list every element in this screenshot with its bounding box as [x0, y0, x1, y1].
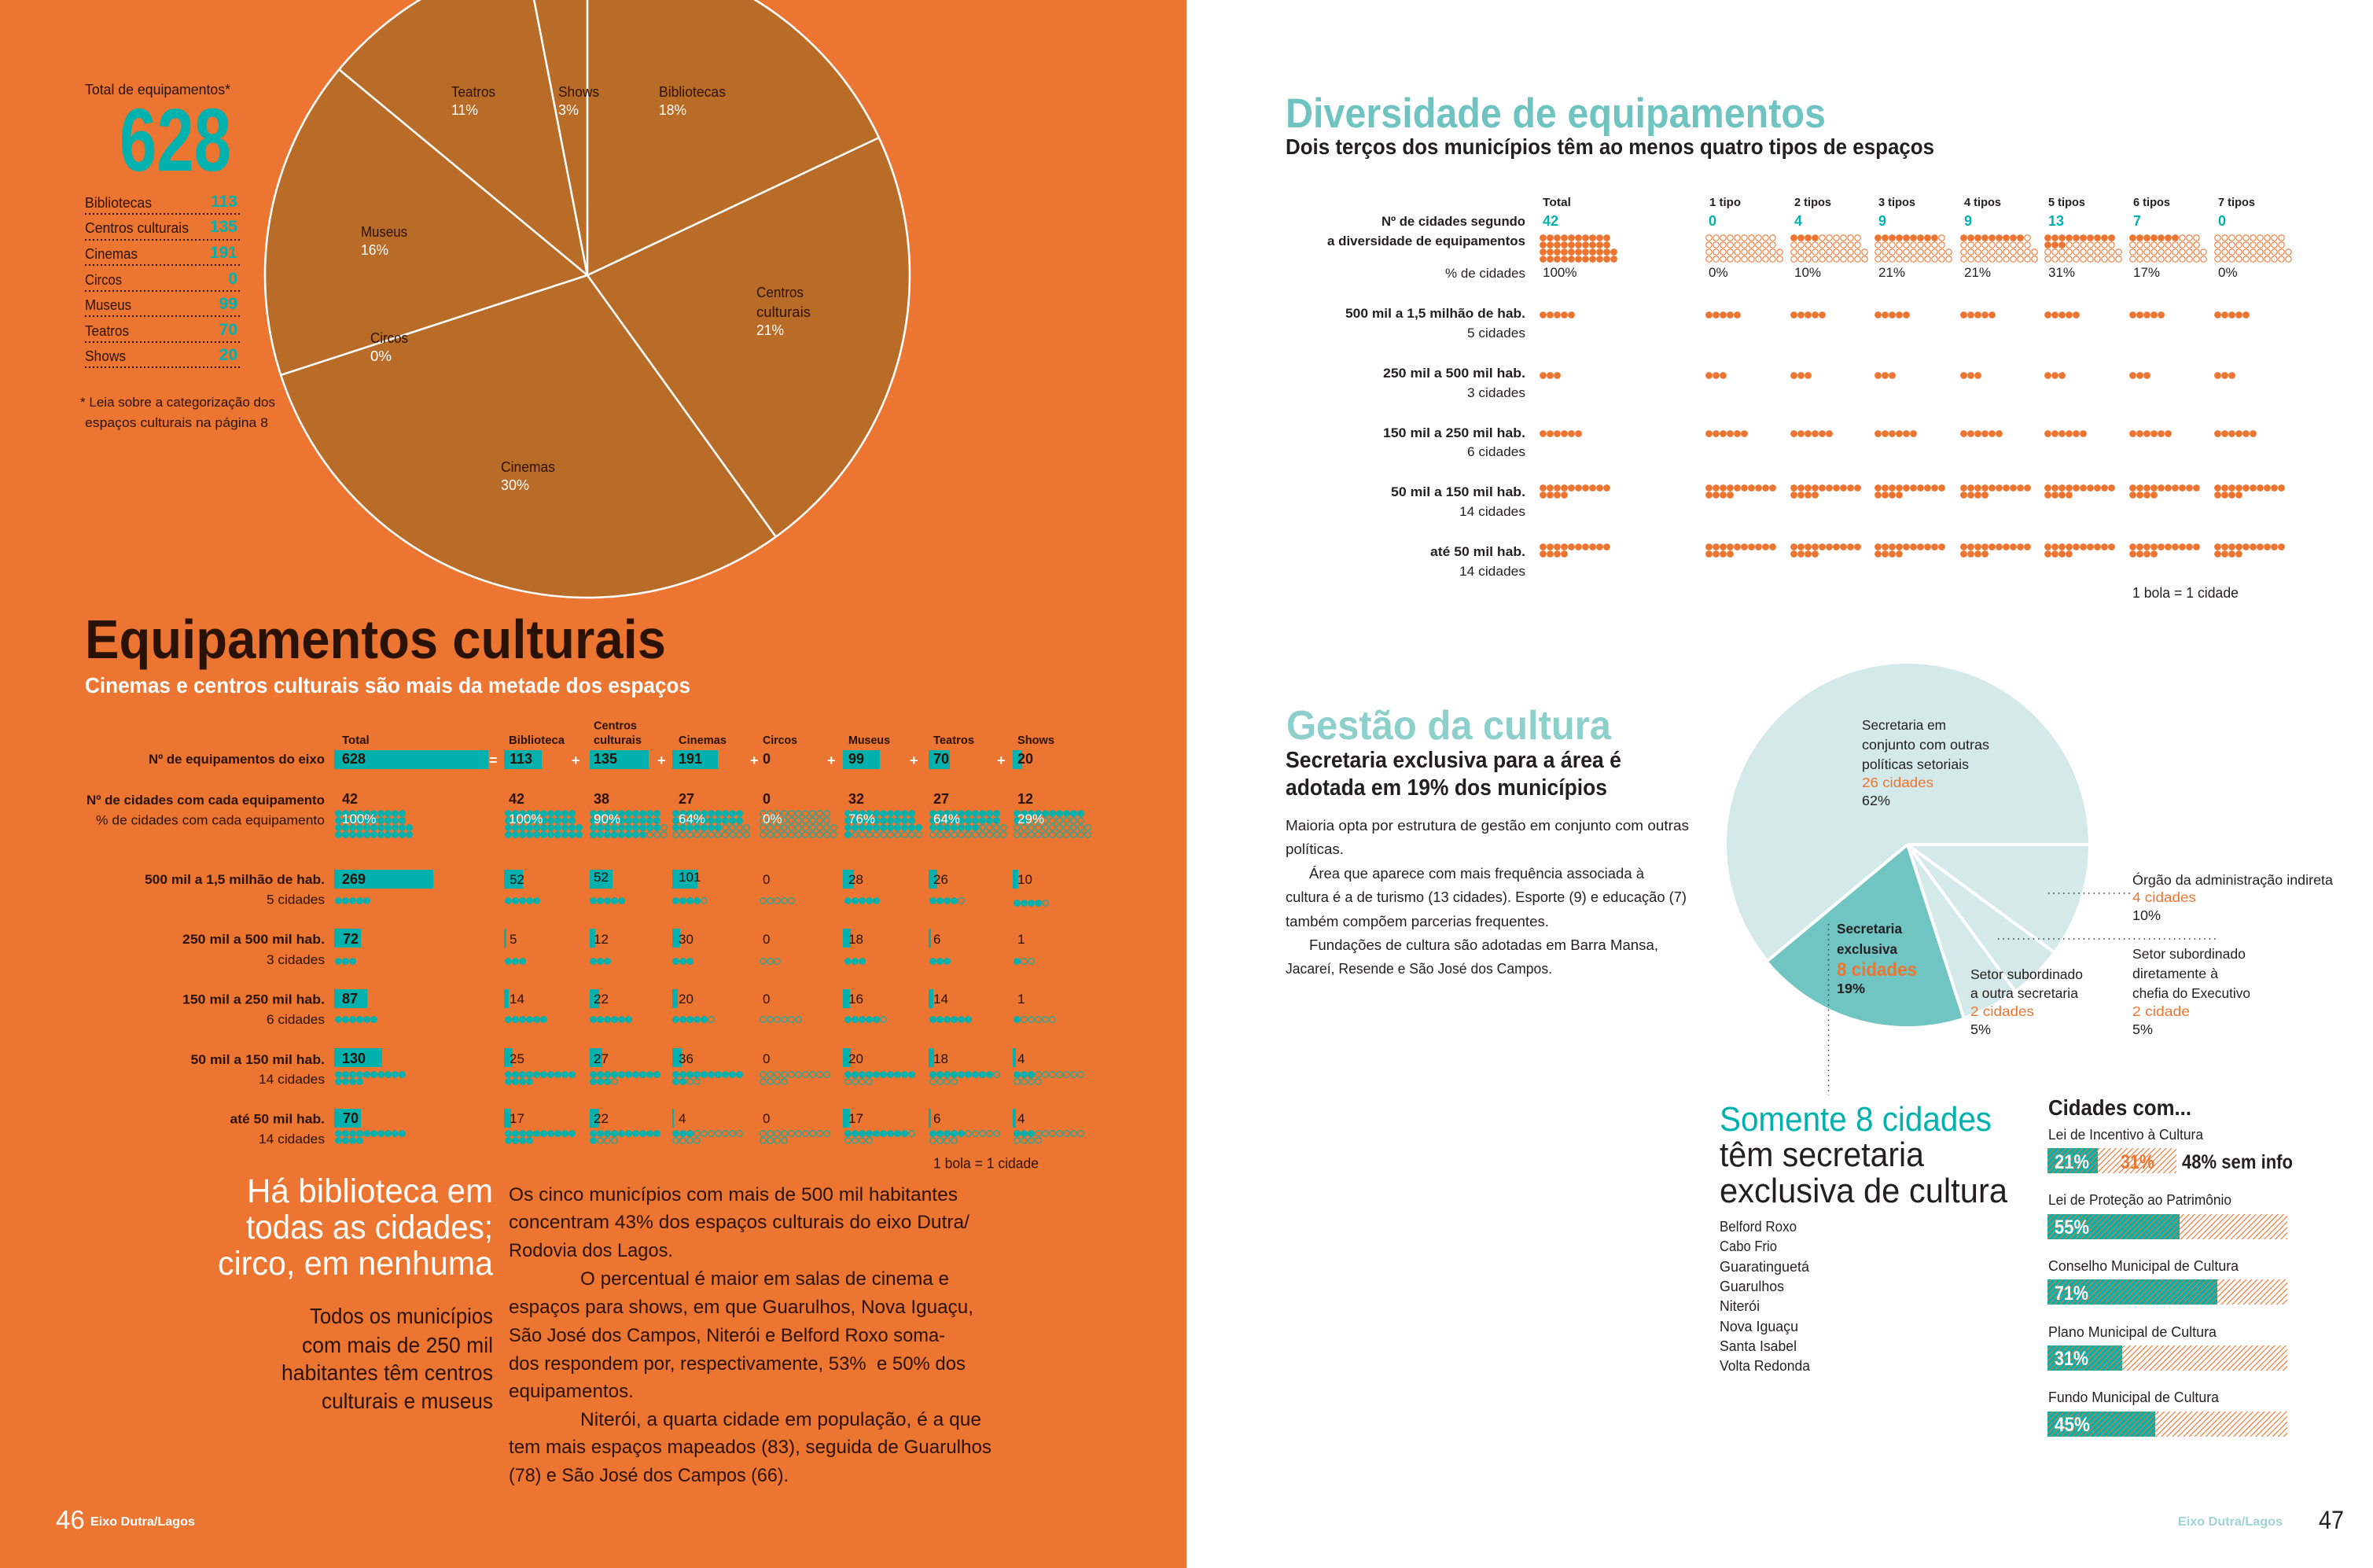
row: 500 mil a 1,5 milhão: 101 [679, 870, 701, 885]
subheading gestão: adotada em 19% dos municípios [1286, 775, 1607, 801]
row: até 50 mil: 6 [933, 1111, 940, 1126]
column headers: culturais [594, 734, 642, 747]
row: 500 mil a 1,5 milhão [145, 870, 1049, 907]
pull quote: biblioteca e circo [218, 1172, 493, 1283]
row: até 50 mil: 17 [848, 1111, 863, 1126]
body text left page: Os cinco municípios com mais de 500 mil habitantes [509, 1184, 958, 1205]
label: setor subordinado ao executivo: Setor subordinado [2132, 946, 2246, 962]
row: 150 a 250 mil: 22 [594, 992, 609, 1007]
table: diversity of equipment [1327, 196, 2292, 601]
row: 50 a 150 mil: 0 [763, 1051, 770, 1066]
bar: lei de incentivo: 21% [2055, 1151, 2089, 1173]
footnote [80, 395, 275, 430]
list of equipment counts [85, 193, 241, 367]
row: 50 a 150 mil: 36 [679, 1051, 694, 1066]
row: number and percent of cities: 21% [1878, 265, 1905, 280]
row: number and percent of cities: 0 [2218, 213, 2226, 229]
title: Equipamentos culturais: Equipamentos culturais [85, 609, 666, 670]
chart: cidades com... [2047, 1095, 2293, 1437]
row: até 50 mil: 17 [510, 1111, 524, 1126]
column headers: Total [342, 734, 370, 747]
footer right [2178, 1506, 2344, 1534]
list of cities: Belford Roxo [1720, 1219, 1797, 1235]
total label: Total de equipamentos* [85, 82, 230, 98]
list of equipment counts: 20 [219, 346, 237, 364]
list of equipment counts: Bibliotecas [85, 195, 152, 211]
chart heading: Cidades com... [2048, 1095, 2191, 1120]
row: number and percent of cities: 0% [763, 812, 782, 826]
label: setor subordinado ao executivo: diretamente à [2132, 966, 2218, 981]
body text left page: São José dos Campos, Niterói e Belford Roxo soma- [509, 1325, 945, 1346]
label: setor subordinado ao executivo: 5% [2132, 1021, 2153, 1037]
body text gestão: Área que aparece com mais frequência associada à [1309, 866, 1645, 882]
label: secretaria exclusiva: 8 cidades [1837, 959, 1917, 981]
body text left page: Niterói, a quarta cidade em população, é a que [580, 1409, 981, 1430]
pie label: Teatros: Teatros [451, 84, 495, 100]
row: number and percent of cities: 42 [1543, 213, 1558, 229]
body text left page: O percentual é maior em salas de cinema e [580, 1268, 949, 1290]
row: até 50 mil: até 50 mil hab. [1430, 545, 1525, 559]
column headers: Circos [763, 734, 797, 747]
pie label: Bibliotecas [659, 84, 726, 118]
row: number and percent of cities: 32 [848, 791, 864, 807]
bar: lei de proteção [2047, 1192, 2287, 1239]
list of equipment counts: 113 [211, 193, 237, 211]
heading: Gestão da cultura: Gestão da cultura [1286, 703, 1612, 749]
pie label: Shows: Shows [558, 84, 599, 100]
list of cities: Niterói [1720, 1298, 1760, 1314]
footer left: Eixo Dutra/Lagos [90, 1515, 195, 1529]
label: secretaria em conjunto: conjunto com outras [1862, 737, 1989, 753]
pie label: Cinemas: 30% [501, 477, 529, 493]
column headers: 3 tipos [1878, 196, 1915, 209]
body text gestão: Maioria opta por estrutura de gestão em conjunto com outras [1286, 818, 1689, 834]
label: setor subordinado a outra secretaria [1970, 966, 2083, 1037]
pie label: Bibliotecas: 18% [659, 102, 686, 118]
label: órgão da administração indireta: 10% [2132, 907, 2161, 923]
pie label: Teatros: 11% [451, 102, 478, 118]
row: 500 mil a 1,5 milhão [1345, 307, 2250, 340]
bar: lei de incentivo: 31% [2121, 1151, 2154, 1173]
row: 500 mil a 1,5 milhão: 10 [1017, 872, 1032, 887]
label: órgão da administração indireta: Órgão da administração indireta [2132, 871, 2333, 888]
footnote: espaços culturais na página 8 [85, 415, 268, 430]
row: até 50 mil: 14 cidades [259, 1132, 325, 1147]
list of cities: Guaratinguetá [1720, 1259, 1810, 1275]
label: setor subordinado ao executivo: chefia do Executivo [2132, 985, 2250, 1001]
row: 150 a 250 mil: 14 [933, 992, 948, 1007]
body text gestão: também compõem parcerias frequentes. [1286, 914, 1549, 929]
bar: lei de incentivo [2047, 1127, 2293, 1173]
row: number and percent of cities: 90% [594, 812, 620, 826]
row: 250 a 500 mil: 1 [1017, 932, 1025, 947]
row: number and percent of cities: Nº de cidades com cada equipamento [86, 793, 325, 808]
row: 500 mil a 1,5 milhão: 500 mil a 1,5 milhão de hab. [145, 873, 325, 887]
footer right: 47 [2319, 1506, 2344, 1534]
row: number and percent of cities: 31% [2048, 265, 2075, 280]
label: secretaria exclusiva: exclusiva [1837, 941, 1897, 957]
label: secretaria em conjunto: 26 cidades [1862, 775, 1933, 790]
pie label: Teatros [451, 84, 495, 118]
row: number of equipment: + [910, 753, 918, 768]
column headers: 5 tipos [2048, 196, 2085, 209]
row: number and percent of cities: 38 [594, 791, 609, 807]
list of equipment counts: Shows [85, 348, 126, 364]
row: number and percent of cities: 42 [509, 791, 524, 807]
row: number of equipment: + [827, 753, 836, 768]
big number 628: 628 [120, 90, 231, 190]
bar: conselho municipal: 71% [2055, 1283, 2088, 1305]
row: number and percent of cities: 100% [342, 812, 376, 826]
row: 500 mil a 1,5 milhão: 5 cidades [267, 893, 325, 907]
footer left: 46 [56, 1505, 85, 1534]
bar: fundo municipal: 45% [2055, 1414, 2090, 1436]
row: number of equipment: 20 [1017, 751, 1033, 767]
row: number and percent of cities: % de cidades [1445, 267, 1525, 281]
row: 50 a 150 mil [1391, 484, 2285, 519]
row: number and percent of cities: 17% [2133, 265, 2160, 280]
body text left page: tem mais espaços mapeados (83), seguida de Guarulhos [509, 1437, 992, 1458]
body text gestão: Jacareí, Resende e São José dos Campos. [1286, 961, 1552, 977]
pie label: Museus: 16% [361, 242, 388, 258]
footnote: * Leia sobre a categorização dos [80, 395, 275, 410]
label: secretaria em conjunto: 62% [1862, 793, 1890, 808]
row: number and percent of cities: 100% [1543, 265, 1576, 280]
body text gestão: Fundações de cultura são adotadas em Barra Mansa, [1309, 937, 1658, 953]
pull quote: biblioteca e circo: circo, em nenhuma [218, 1245, 493, 1283]
row: 150 a 250 mil: 6 cidades [267, 1013, 325, 1027]
list of equipment counts: 70 [219, 321, 237, 339]
subheading diversidade: Dois terços dos municípios têm ao menos quatro tipos de espaços [1286, 134, 1934, 159]
row: number and percent of cities: 7 [2133, 213, 2141, 229]
row: 150 a 250 mil: 16 [848, 992, 863, 1007]
row: number of equipment: 135 [594, 751, 617, 767]
row: 150 a 250 mil [182, 989, 1056, 1027]
column headers: Shows [1017, 734, 1054, 747]
row: number and percent of cities: 0% [1709, 265, 1728, 280]
row: até 50 mil [1430, 543, 2285, 579]
left page background [0, 0, 1186, 1568]
column headers: Cinemas [679, 734, 727, 747]
list of equipment counts: 0 [228, 270, 237, 288]
pie label: Shows [558, 84, 599, 118]
bar: lei de proteção: Lei de Proteção ao Patrimônio [2048, 1192, 2231, 1208]
subtitle: Cinemas e centros culturais são mais da metade dos espaços [85, 673, 690, 698]
label: setor subordinado a outra secretaria: 5% [1970, 1021, 1991, 1037]
row: 150 a 250 mil: 6 cidades [1467, 445, 1525, 459]
column headers [1543, 196, 2255, 209]
row: 500 mil a 1,5 milhão: 52 [594, 870, 609, 885]
row: 500 mil a 1,5 milhão: 26 [933, 872, 948, 887]
bar: lei de incentivo: 48% sem info [2182, 1151, 2293, 1173]
list of cities: Guarulhos [1720, 1279, 1784, 1294]
bar: plano municipal: 31% [2055, 1348, 2088, 1370]
row: até 50 mil: 70 [343, 1110, 359, 1126]
row: até 50 mil: 0 [763, 1111, 770, 1126]
column headers: Total [1543, 196, 1571, 209]
pie label: Centros culturais: 21% [756, 322, 784, 338]
row: até 50 mil: 22 [594, 1111, 609, 1126]
row: 150 a 250 mil: 20 [679, 992, 694, 1007]
row: 500 mil a 1,5 milhão: 52 [510, 872, 524, 887]
row: 50 a 150 mil: 50 mil a 150 mil hab. [190, 1053, 325, 1067]
row: até 50 mil: até 50 mil hab. [230, 1112, 325, 1126]
pie label: Museus: Museus [361, 224, 407, 240]
body text left page: concentram 43% dos espaços culturais do eixo Dutra/ [509, 1212, 969, 1233]
pull quote: biblioteca e circo: Há biblioteca em [247, 1172, 493, 1210]
row: number and percent of cities: 0 [763, 791, 771, 807]
row: number and percent of cities: 21% [1964, 265, 1991, 280]
row: 500 mil a 1,5 milhão: 500 mil a 1,5 milhão de hab. [1345, 307, 1525, 321]
row: 150 a 250 mil: 150 mil a 250 mil hab. [1383, 426, 1525, 440]
list of equipment counts: 99 [219, 295, 237, 313]
column headers: 4 tipos [1964, 196, 2001, 209]
row: 250 a 500 mil: 12 [594, 932, 609, 947]
row: number and percent of cities: 27 [679, 791, 694, 807]
row: até 50 mil [230, 1109, 1084, 1147]
row: number and percent of cities: 42 [342, 791, 358, 807]
label: secretaria exclusiva: 19% [1837, 981, 1865, 996]
row: até 50 mil: 4 [1017, 1111, 1025, 1126]
row: number of equipment [149, 750, 1033, 769]
bar: conselho municipal: Conselho Municipal de Cultura [2048, 1258, 2239, 1274]
list of cities: Cabo Frio [1720, 1239, 1777, 1254]
label: secretaria em conjunto: Secretaria em [1862, 717, 1946, 733]
body text left page: espaços para shows, em que Guarulhos, Nova Iguaçu, [509, 1297, 973, 1318]
row: 500 mil a 1,5 milhão: 269 [342, 871, 366, 887]
row: 50 a 150 mil: 14 cidades [259, 1073, 325, 1087]
bar: plano municipal: Plano Municipal de Cultura [2048, 1324, 2217, 1340]
row: 50 a 150 mil: 27 [594, 1051, 609, 1066]
side note: municípios com mais de 250 mil: habitantes têm centros [281, 1360, 493, 1385]
legend: 1 bola = 1 cidade: 1 bola = 1 cidade [2132, 585, 2239, 601]
row: number and percent of cities: 12 [1017, 791, 1033, 807]
panel: total of equipment [80, 82, 275, 430]
pie label: Bibliotecas: Bibliotecas [659, 84, 726, 100]
column headers: 6 tipos [2133, 196, 2170, 209]
row: number of equipment: 628 [342, 751, 366, 767]
row: number of equipment: + [657, 753, 666, 768]
list of cities: Nova Iguaçu [1720, 1319, 1798, 1334]
row: 50 a 150 mil: 25 [510, 1051, 524, 1066]
row: 500 mil a 1,5 milhão: 28 [848, 872, 863, 887]
row: number and percent of cities: 29% [1017, 812, 1044, 826]
body text left page: Rodovia dos Lagos. [509, 1240, 673, 1261]
row: number of equipment: = [489, 753, 498, 768]
right page [1286, 90, 2344, 1534]
row: 250 a 500 mil: 72 [343, 931, 359, 947]
label: setor subordinado ao executivo: 2 cidade [2132, 1003, 2190, 1019]
bar: conselho municipal [2047, 1258, 2287, 1305]
bar: lei de proteção: 55% [2055, 1216, 2089, 1239]
row: 250 a 500 mil [182, 929, 1035, 967]
list of equipment counts: Teatros [85, 323, 129, 339]
row: 50 a 150 mil: 130 [342, 1051, 366, 1066]
row: number and percent of cities: 64% [679, 812, 705, 826]
body text gestão: cultura é a de turismo (13 cidades). Esporte (9) e educação (7) [1286, 889, 1687, 905]
row: number and percent of cities: 10% [1794, 265, 1821, 280]
callout heading [1720, 1100, 2007, 1210]
row: 150 a 250 mil: 87 [342, 991, 358, 1007]
pie label: Centros culturais: culturais [756, 304, 811, 320]
bar: fundo municipal: Fundo Municipal de Cultura [2048, 1389, 2220, 1405]
pie label: Museus [361, 224, 407, 258]
list of equipment counts: 135 [210, 218, 237, 236]
row: number of equipment: 99 [848, 751, 864, 767]
label: secretaria exclusiva: Secretaria [1837, 921, 1902, 937]
bar: lei de incentivo: Lei de Incentivo à Cultura [2048, 1127, 2204, 1143]
subheading gestão [1286, 748, 1621, 801]
row: 150 a 250 mil: 1 [1017, 992, 1025, 1007]
side note: municípios com mais de 250 mil: culturais e museus [322, 1389, 493, 1413]
footer left [56, 1505, 195, 1534]
footer right: Eixo Dutra/Lagos [2178, 1515, 2283, 1529]
callout heading: têm secretaria [1720, 1136, 1924, 1174]
column headers: Museus [848, 734, 890, 747]
list of equipment counts: Circos [85, 272, 122, 288]
row: number and percent of cities: 64% [933, 812, 960, 826]
row: number of equipment: 0 [763, 751, 771, 767]
row: 250 a 500 mil [1383, 366, 2235, 400]
bar: fundo municipal [2047, 1389, 2287, 1437]
column headers: Centros [594, 719, 637, 733]
label: setor subordinado a outra secretaria: 2 cidades [1970, 1003, 2034, 1019]
label: órgão da administração indireta [2132, 871, 2333, 923]
row: number and percent of cities: 9 [1964, 213, 1972, 229]
pie chart: management structure [1727, 664, 2333, 1095]
body text left page: equipamentos. [509, 1381, 634, 1402]
pie label: Circos [370, 330, 408, 364]
row: number and percent of cities: a diversidade de equipamentos [1327, 234, 1525, 248]
row: 150 a 250 mil: 0 [763, 992, 770, 1007]
list of equipment counts: Centros culturais [85, 220, 189, 236]
row: number of equipment: + [572, 753, 580, 768]
column headers: Biblioteca [509, 734, 565, 747]
row: number of equipment: + [997, 753, 1006, 768]
heading: Diversidade de equipamentos: Diversidade de equipamentos [1286, 90, 1826, 137]
body text gestão [1286, 818, 1689, 977]
row: 150 a 250 mil: 150 mil a 250 mil hab. [182, 992, 325, 1007]
column headers: 2 tipos [1794, 196, 1831, 209]
row: number and percent of cities: 27 [933, 791, 949, 807]
row: 250 a 500 mil: 0 [763, 932, 770, 947]
row: 500 mil a 1,5 milhão: 0 [763, 872, 770, 887]
list of cities: Volta Redonda [1720, 1358, 1811, 1374]
pie chart: equipment share [265, 0, 910, 598]
label: órgão da administração indireta: 4 cidades [2132, 889, 2196, 905]
label: setor subordinado ao executivo [2132, 946, 2250, 1037]
row: 250 a 500 mil: 30 [679, 932, 694, 947]
body text left page: dos respondem por, respectivamente, 53% e 50% dos [509, 1353, 966, 1375]
row: number and percent of cities: 0% [2218, 265, 2238, 280]
pie label: Shows: 3% [558, 102, 579, 118]
side note: municípios com mais de 250 mil: Todos os municípios [310, 1304, 493, 1328]
row: 250 a 500 mil: 250 mil a 500 mil hab. [1383, 366, 1525, 381]
row: 250 a 500 mil: 18 [848, 932, 863, 947]
row: 250 a 500 mil: 250 mil a 500 mil hab. [182, 933, 325, 947]
label: setor subordinado a outra secretaria: a outra secretaria [1970, 985, 2078, 1001]
side note: municípios com mais de 250 mil: com mais de 250 mil [302, 1333, 493, 1357]
row: 150 a 250 mil: 14 [510, 992, 524, 1007]
row: 50 a 150 mil: 50 mil a 150 mil hab. [1391, 485, 1525, 499]
row: number and percent of cities [86, 791, 1091, 838]
bar: plano municipal [2047, 1324, 2287, 1371]
callout heading: exclusiva de cultura [1720, 1172, 2007, 1210]
callout: somente 8 cidades [1720, 1100, 2007, 1374]
pull quote: biblioteca e circo: todas as cidades; [246, 1209, 493, 1246]
column headers: 1 tipo [1709, 196, 1741, 209]
pie label: Cinemas [501, 459, 555, 493]
list of cities: Santa Isabel [1720, 1338, 1797, 1354]
subheading gestão: Secretaria exclusiva para a área é [1286, 748, 1621, 773]
row: 50 a 150 mil: 18 [933, 1051, 948, 1066]
row: 250 a 500 mil: 3 cidades [1467, 386, 1525, 400]
pie label: Centros culturais [756, 285, 811, 338]
pie label: Circos: Circos [370, 330, 408, 346]
row: até 50 mil: 4 [679, 1111, 686, 1126]
row: 50 a 150 mil [190, 1048, 1084, 1087]
list of equipment counts: Cinemas [85, 246, 138, 262]
row: number of equipment: 191 [679, 751, 702, 767]
label: secretaria em conjunto [1862, 717, 1989, 808]
table: equipment by city size [86, 719, 1091, 1172]
row: 150 a 250 mil [1383, 426, 2257, 459]
label: setor subordinado a outra secretaria: Setor subordinado [1970, 966, 2083, 982]
column headers: 7 tipos [2218, 196, 2255, 209]
row: number and percent of cities: Nº de cidades segundo [1381, 215, 1525, 229]
row: number of equipment: Nº de equipamentos do eixo [149, 753, 325, 767]
row: 500 mil a 1,5 milhão: 5 cidades [1467, 326, 1525, 340]
row: number of equipment: 70 [933, 751, 949, 767]
row: number of equipment: + [750, 753, 759, 768]
row: number and percent of cities: 100% [509, 812, 543, 826]
body text gestão: políticas. [1286, 841, 1344, 857]
row: number and percent of cities: 76% [848, 812, 875, 826]
label: secretaria exclusiva [1837, 921, 1917, 996]
row: number and percent of cities: 0 [1709, 213, 1716, 229]
row: number and percent of cities: 9 [1878, 213, 1886, 229]
callout heading: Somente 8 cidades [1720, 1100, 1992, 1139]
row: 250 a 500 mil: 6 [933, 932, 940, 947]
pie label: Cinemas: Cinemas [501, 459, 555, 475]
list of equipment counts: 191 [210, 244, 237, 262]
list of cities [1720, 1219, 1811, 1374]
row: number and percent of cities: % de cidades com cada equipamento [96, 813, 325, 827]
pie label: Centros culturais: Centros [756, 285, 804, 300]
column headers [342, 719, 1054, 747]
row: 250 a 500 mil: 3 cidades [267, 953, 325, 967]
column headers: Teatros [933, 734, 974, 747]
legend: 1 bola = 1 cidade: 1 bola = 1 cidade [933, 1156, 1039, 1172]
row: 50 a 150 mil: 4 [1017, 1051, 1025, 1066]
list of equipment counts: Museus [85, 297, 131, 313]
body text left page: (78) e São José dos Campos (66). [509, 1465, 789, 1486]
row: number and percent of cities: 4 [1794, 213, 1802, 229]
row: 50 a 150 mil: 14 cidades [1459, 505, 1525, 519]
row: 250 a 500 mil: 5 [510, 932, 517, 947]
row: number and percent of cities [1327, 213, 2292, 281]
row: number and percent of cities: 13 [2048, 213, 2064, 229]
side note: municípios com mais de 250 mil [281, 1304, 493, 1413]
row: number of equipment: 113 [510, 751, 532, 767]
row: 50 a 150 mil: 20 [848, 1051, 863, 1066]
row: até 50 mil: 14 cidades [1459, 565, 1525, 579]
pie label: Circos: 0% [370, 348, 392, 364]
label: secretaria em conjunto: políticas setoriais [1862, 756, 1969, 772]
body text left page [509, 1184, 992, 1486]
